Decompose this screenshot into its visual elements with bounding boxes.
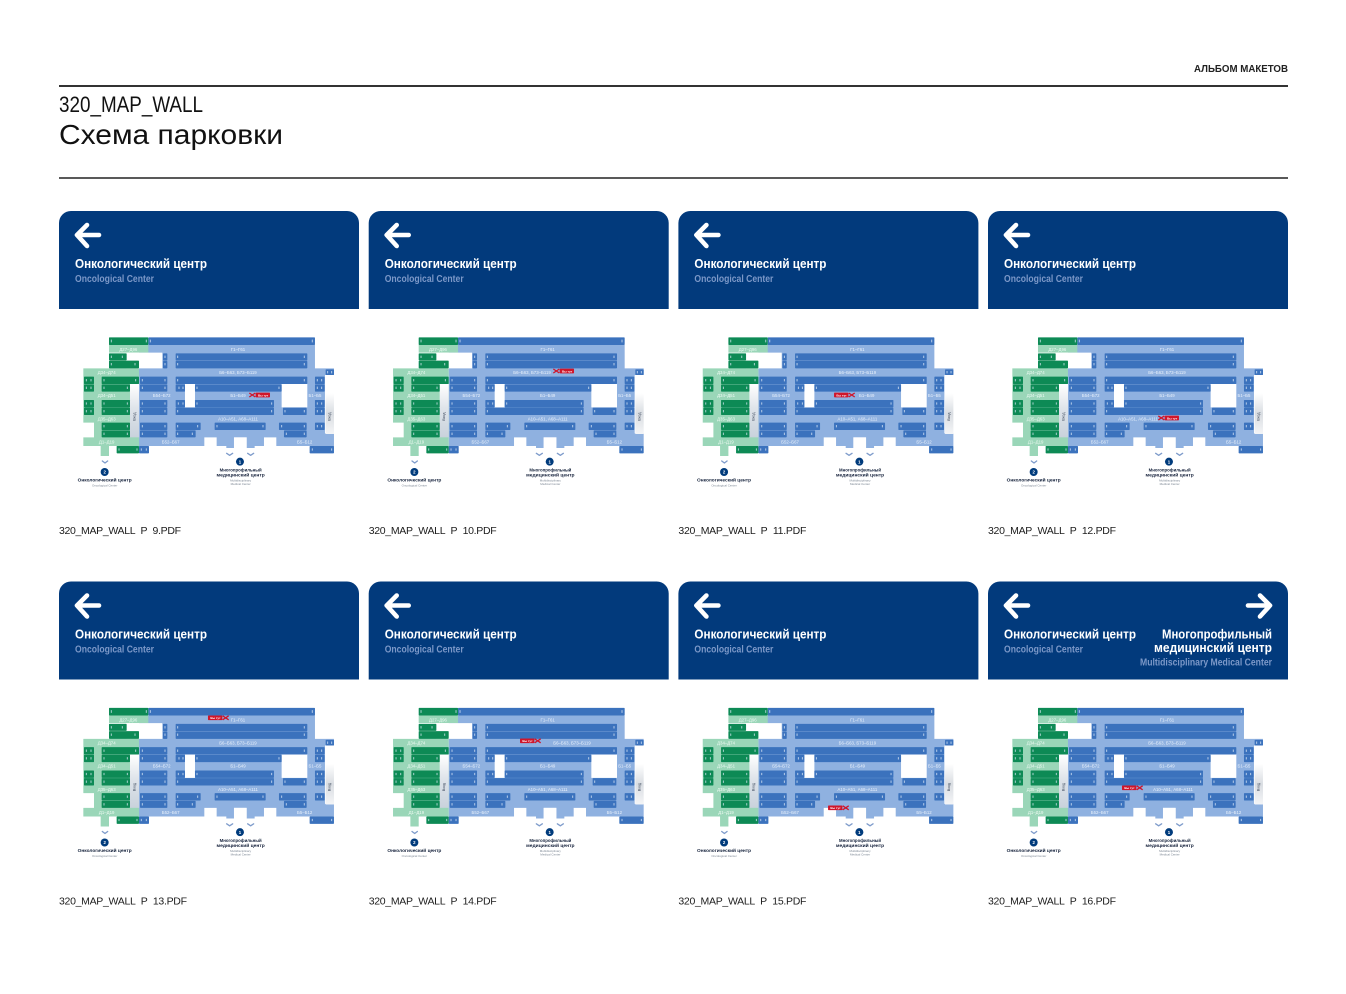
parking map: 2 <box>723 840 726 845</box>
sign: both centers: Многопрофильный <box>1162 626 1272 642</box>
parking map: Б52–Б67 <box>781 439 800 444</box>
parking map: Medical Center <box>850 482 870 486</box>
parking map: Д27–Д96 <box>119 347 138 352</box>
parking map: Г1–Г61 <box>850 347 865 352</box>
sign: both centers <box>988 582 1288 680</box>
parking map: Multidisciplinary <box>540 849 561 853</box>
parking map: Б52–Б67 <box>781 810 800 815</box>
sign: Oncological Center <box>59 582 359 680</box>
parking map: Многопрофильный <box>839 838 881 843</box>
sign: Oncological Center <box>369 582 669 680</box>
parking map: Г1–Г61 <box>231 717 246 722</box>
parking map: Б6–Б63, Б73–Б119 <box>513 370 551 375</box>
parking map: Б1–Б49 <box>859 393 875 398</box>
you-are-here marker: Вы тут <box>562 369 573 373</box>
parking map: Д1–Д19 <box>1028 810 1044 815</box>
parking map: 1 <box>239 459 242 464</box>
parking map: Б1–Б49 <box>540 763 556 768</box>
parking map: Б5–Б12 <box>297 439 313 444</box>
parking map: Б52–Б67 <box>1091 810 1109 815</box>
panel: P 10 <box>369 211 669 537</box>
parking map: Г1–Г61 <box>1160 717 1175 722</box>
parking map: Oncological Center <box>1021 483 1046 487</box>
sign: Oncological Center: Oncological Center <box>75 274 154 285</box>
parking map: А10–А51, А68–А111 <box>837 787 878 792</box>
sign: both centers: Онкологический центр <box>1004 626 1136 642</box>
parking map: Г1–Г61 <box>231 347 246 352</box>
file name: 320_MAP_WALL P 13.PDF <box>59 896 187 908</box>
sign: Oncological Center: Онкологический центр <box>1004 256 1136 271</box>
parking map: Б1–Б5 <box>928 763 941 768</box>
parking map <box>1007 337 1263 487</box>
parking map <box>78 708 334 858</box>
parking map: А10–А51, А68–А111 <box>1118 416 1158 421</box>
parking map: 1 <box>1168 830 1171 835</box>
parking map: Oncological Center <box>402 854 427 858</box>
sign: Oncological Center: Oncological Center <box>694 274 773 285</box>
parking map: Oncological Center <box>1021 854 1046 858</box>
parking map: медицинский центр <box>216 843 265 848</box>
parking map: Вход <box>1061 782 1065 791</box>
sign: both centers: Oncological Center <box>1004 644 1083 656</box>
parking map: Д27–Д96 <box>739 717 757 722</box>
parking map: Oncological Center <box>711 854 737 858</box>
sign: Oncological Center: Oncological Center <box>75 644 154 656</box>
parking map: Вход <box>947 412 951 421</box>
parking map: Вход <box>132 782 136 791</box>
you-are-here marker <box>208 715 229 720</box>
parking map: Вход <box>947 782 951 791</box>
parking map: Онкологический центр <box>387 848 442 853</box>
parking map: Д35–Д63 <box>1027 787 1045 792</box>
parking map: Multidisciplinary <box>1159 478 1181 482</box>
parking map: Б1–Б49 <box>230 393 246 398</box>
you-are-here marker <box>834 393 855 397</box>
parking map: А10–А51, А68–А111 <box>837 416 878 421</box>
parking map: Б1–Б5 <box>928 393 941 398</box>
parking map: Б6–Б63, Б73–Б119 <box>553 740 591 745</box>
parking map: Д34–Д51 <box>407 393 426 398</box>
parking map: Б54–Б72 <box>1082 763 1100 768</box>
you-are-here marker: Вы тут <box>210 716 221 720</box>
parking map: Г1–Г61 <box>1160 347 1175 352</box>
parking map: Medical Center <box>540 482 560 486</box>
parking map: медицинский центр <box>836 843 885 848</box>
parking map: А10–А51, А68–А111 <box>218 416 258 421</box>
parking map: Вход <box>637 782 641 791</box>
panel: P 14 <box>369 582 669 908</box>
parking map: Б1–Б5 <box>618 763 632 768</box>
parking map: медицинский центр <box>216 472 265 477</box>
parking map: Medical Center <box>1160 852 1180 856</box>
parking map: Д34–Д74 <box>98 740 116 745</box>
parking map: Д1–Д19 <box>99 439 115 444</box>
parking map: Б52–Б67 <box>162 439 180 444</box>
you-are-here marker: Вы тут <box>1167 416 1178 420</box>
parking map: Medical Center <box>231 482 251 486</box>
parking map: Вход <box>1257 782 1261 791</box>
parking map: Medical Center <box>850 852 870 856</box>
parking map: Многопрофильный <box>529 467 572 472</box>
you-are-here marker: Вы тут <box>522 739 533 743</box>
parking map: Д34–Д51 <box>407 763 426 768</box>
parking map: Онкологический центр <box>697 848 751 853</box>
parking map: Вход <box>1061 412 1065 421</box>
file name: 320_MAP_WALL P 12.PDF <box>988 525 1116 537</box>
you-are-here marker <box>828 805 849 810</box>
parking map: Д27–Д96 <box>1048 347 1067 352</box>
parking map: Б54–Б72 <box>1082 393 1100 398</box>
you-are-here marker: Вы тут <box>1124 786 1135 790</box>
sign: Oncological Center <box>678 582 978 680</box>
parking map: Д34–Д51 <box>717 763 736 768</box>
parking map: Д27–Д96 <box>429 347 448 352</box>
parking map: Г1–Г61 <box>541 717 555 722</box>
parking map: Б1–Б5 <box>1238 393 1251 398</box>
panel: P 16 <box>988 582 1288 908</box>
sign: Oncological Center <box>678 211 978 309</box>
parking map: Вход <box>752 782 756 791</box>
parking map: Oncological Center <box>92 854 117 858</box>
parking map: медицинский центр <box>526 472 575 477</box>
parking map: Б1–Б49 <box>230 763 246 768</box>
parking map: Многопрофильный <box>1149 467 1191 472</box>
parking map: Б54–Б72 <box>153 763 171 768</box>
parking map: Б5–Б12 <box>916 810 932 815</box>
parking map: Б1–Б49 <box>540 393 556 398</box>
you-are-here marker <box>1122 785 1143 790</box>
parking map: 2 <box>413 470 416 475</box>
sign: Oncological Center: Онкологический центр <box>75 256 207 271</box>
parking map: Д35–Д63 <box>407 416 426 421</box>
parking map: Medical Center <box>1160 482 1180 486</box>
parking map: 2 <box>723 470 726 475</box>
parking map: 1 <box>858 459 861 464</box>
file name: 320_MAP_WALL P 10.PDF <box>369 525 497 537</box>
parking map: Д35–Д63 <box>1027 416 1045 421</box>
file name: 320_MAP_WALL P 15.PDF <box>678 896 806 908</box>
parking map: медицинский центр <box>526 843 575 848</box>
you-are-here marker: Вы тут <box>836 393 847 397</box>
parking map: Д1–Д19 <box>409 810 425 815</box>
parking map: Б1–Б5 <box>309 763 322 768</box>
parking map <box>78 337 334 487</box>
parking map <box>697 708 953 858</box>
parking map: Д34–Д51 <box>1027 763 1045 768</box>
you-are-here marker <box>553 369 574 373</box>
parking map: Д1–Д19 <box>718 439 734 444</box>
sign: Oncological Center <box>59 211 359 309</box>
parking map: Б54–Б72 <box>462 393 481 398</box>
parking map: Д34–Д74 <box>1027 370 1045 375</box>
title: Схема парковки <box>59 119 283 150</box>
parking map: Д27–Д96 <box>1048 717 1067 722</box>
parking map: Д35–Д63 <box>407 787 426 792</box>
file name: 320_MAP_WALL P 14.PDF <box>369 896 497 908</box>
parking map: А10–А51, А68–А111 <box>528 416 568 421</box>
parking map: Б1–Б5 <box>309 393 322 398</box>
sign: Oncological Center <box>988 211 1288 309</box>
panel: P 15 <box>678 582 978 908</box>
parking map: Д1–Д19 <box>99 810 115 815</box>
parking map: 2 <box>413 840 416 845</box>
parking map: 1 <box>858 830 861 835</box>
parking map: Многопрофильный <box>220 838 262 843</box>
parking map: А10–А51, А68–А111 <box>218 787 258 792</box>
parking map: Онкологический центр <box>78 848 132 853</box>
panel: P 13 <box>59 582 359 908</box>
parking map: Д34–Д74 <box>717 740 736 745</box>
parking map: Вход <box>442 412 446 421</box>
parking map: Multidisciplinary <box>230 849 252 853</box>
parking map: Д27–Д96 <box>429 717 448 722</box>
parking map: Д27–Д96 <box>739 347 757 352</box>
parking map: Онкологический центр <box>387 478 442 483</box>
parking map: Oncological Center <box>92 483 117 487</box>
parking map: Б52–Б67 <box>162 810 180 815</box>
parking map: Multidisciplinary <box>1159 849 1181 853</box>
sign: both centers: медицинский центр <box>1154 640 1272 655</box>
parking map <box>387 337 644 487</box>
parking map: 1 <box>548 830 551 835</box>
parking map: Вход <box>132 412 136 421</box>
parking map: Б5–Б12 <box>607 439 623 444</box>
parking map: Д34–Д74 <box>407 740 426 745</box>
parking map: Д35–Д63 <box>717 416 736 421</box>
parking map: Онкологический центр <box>697 478 751 483</box>
parking map: Д34–Д51 <box>98 393 116 398</box>
you-are-here marker <box>520 738 541 743</box>
parking map: Б1–Б5 <box>1238 763 1251 768</box>
parking map <box>1007 708 1263 858</box>
parking map: Oncological Center <box>711 483 737 487</box>
parking map: Multidisciplinary <box>230 478 252 482</box>
parking map: Д1–Д19 <box>409 439 425 444</box>
parking map: Б5–Б12 <box>607 810 623 815</box>
you-are-here marker: Вы тут <box>830 806 841 810</box>
parking map: 2 <box>103 470 106 475</box>
you-are-here marker <box>1158 416 1179 420</box>
parking map: Г1–Г61 <box>850 717 865 722</box>
parking map: А10–А51, А68–А111 <box>1153 787 1193 792</box>
parking map: Г1–Г61 <box>541 347 555 352</box>
sign: Oncological Center <box>369 211 669 309</box>
parking map: Д27–Д96 <box>119 717 138 722</box>
sign: Oncological Center: Онкологический центр <box>75 626 207 642</box>
parking map: Б6–Б63, Б73–Б119 <box>839 370 877 375</box>
parking map: Д35–Д63 <box>717 787 736 792</box>
parking map: Д1–Д19 <box>718 810 734 815</box>
parking map: медицинский центр <box>836 472 885 477</box>
parking map: Д34–Д74 <box>98 370 116 375</box>
parking map: 1 <box>1168 459 1171 464</box>
parking map: Б52–Б67 <box>471 810 490 815</box>
sign: Oncological Center: Онкологический центр <box>694 256 826 271</box>
panel: P 12 <box>988 211 1288 537</box>
parking map: Д34–Д74 <box>1027 740 1045 745</box>
parking map <box>697 337 953 487</box>
parking map: Вход <box>1257 412 1261 421</box>
parking map: медицинский центр <box>1145 843 1194 848</box>
parking map: Б1–Б5 <box>618 393 632 398</box>
parking map: Онкологический центр <box>78 478 132 483</box>
file name: 320_MAP_WALL P 16.PDF <box>988 896 1116 908</box>
panel: P 9 <box>59 211 359 537</box>
sign: Oncological Center: Oncological Center <box>385 274 464 285</box>
parking map: Вход <box>328 412 332 421</box>
parking map: Вход <box>328 782 332 791</box>
parking map: Б6–Б63, Б73–Б119 <box>1148 370 1186 375</box>
parking map: Б5–Б12 <box>916 439 932 444</box>
parking map: Д34–Д51 <box>1027 393 1045 398</box>
parking map: 1 <box>548 459 551 464</box>
parking map: Multidisciplinary <box>850 478 871 482</box>
parking map: Б5–Б12 <box>1226 439 1242 444</box>
parking map: 2 <box>103 840 106 845</box>
sign: Oncological Center: Онкологический центр <box>385 626 517 642</box>
parking map: Б1–Б49 <box>1159 763 1175 768</box>
parking map: Oncological Center <box>402 483 427 487</box>
parking map: Б5–Б12 <box>297 810 313 815</box>
parking map: Д1–Д19 <box>1028 439 1044 444</box>
parking map: Д35–Д63 <box>98 787 116 792</box>
parking map: Многопрофильный <box>529 838 572 843</box>
parking map: Д34–Д74 <box>407 370 426 375</box>
parking map: А10–А51, А68–А111 <box>528 787 568 792</box>
parking map: Multidisciplinary <box>850 849 871 853</box>
panel: P 11 <box>678 211 978 537</box>
parking map: Б6–Б63, Б73–Б119 <box>1148 740 1186 745</box>
parking map: 1 <box>239 830 242 835</box>
sign: Oncological Center: Онкологический центр <box>694 626 826 642</box>
you-are-here marker: Вы тут <box>258 393 269 397</box>
parking map: Б52–Б67 <box>471 439 490 444</box>
parking map: Вход <box>442 782 446 791</box>
album label: АЛЬБОМ МАКЕТОВ <box>1194 63 1288 75</box>
parking map: Б54–Б72 <box>772 393 791 398</box>
you-are-here marker <box>249 393 270 397</box>
parking map: медицинский центр <box>1145 472 1194 477</box>
sign: both centers: Multidisciplinary Medical Center <box>1140 658 1272 668</box>
file name: 320_MAP_WALL P 9.PDF <box>59 525 181 537</box>
parking map: Multidisciplinary <box>540 478 561 482</box>
parking map: Д34–Д51 <box>717 393 736 398</box>
parking map: 2 <box>1032 470 1035 475</box>
parking map: 2 <box>1032 840 1035 845</box>
parking map: Д35–Д63 <box>98 416 116 421</box>
parking map: Б54–Б72 <box>153 393 171 398</box>
sign: Oncological Center: Онкологический центр <box>385 256 517 271</box>
parking map: Онкологический центр <box>1007 848 1061 853</box>
parking map: Вход <box>752 412 756 421</box>
file name: 320_MAP_WALL P 11.PDF <box>678 525 806 537</box>
parking map: Б54–Б72 <box>462 763 481 768</box>
parking map: Б52–Б67 <box>1091 439 1109 444</box>
parking map <box>387 708 644 858</box>
parking map: Б6–Б63, Б73–Б119 <box>839 740 877 745</box>
title code: 320_MAP_WALL <box>59 92 203 117</box>
parking map: Многопрофильный <box>839 467 881 472</box>
parking map: Medical Center <box>231 852 251 856</box>
parking map: Многопрофильный <box>220 467 262 472</box>
parking map: Многопрофильный <box>1149 838 1191 843</box>
parking map: Б1–Б49 <box>850 763 866 768</box>
parking map: Б6–Б63, Б73–Б119 <box>219 740 257 745</box>
parking map: Medical Center <box>540 852 560 856</box>
sign: Oncological Center: Oncological Center <box>385 644 464 656</box>
parking map: Б6–Б63, Б73–Б119 <box>219 370 257 375</box>
parking map: Д34–Д51 <box>98 763 116 768</box>
parking map: Б5–Б12 <box>1226 810 1242 815</box>
parking map: Д34–Д74 <box>717 370 736 375</box>
parking map: Вход <box>637 412 641 421</box>
parking map: Онкологический центр <box>1007 478 1061 483</box>
parking map: Б54–Б72 <box>772 763 791 768</box>
parking map: Б1–Б49 <box>1159 393 1175 398</box>
sign: Oncological Center: Oncological Center <box>1004 274 1083 285</box>
sign: Oncological Center: Oncological Center <box>694 644 773 656</box>
